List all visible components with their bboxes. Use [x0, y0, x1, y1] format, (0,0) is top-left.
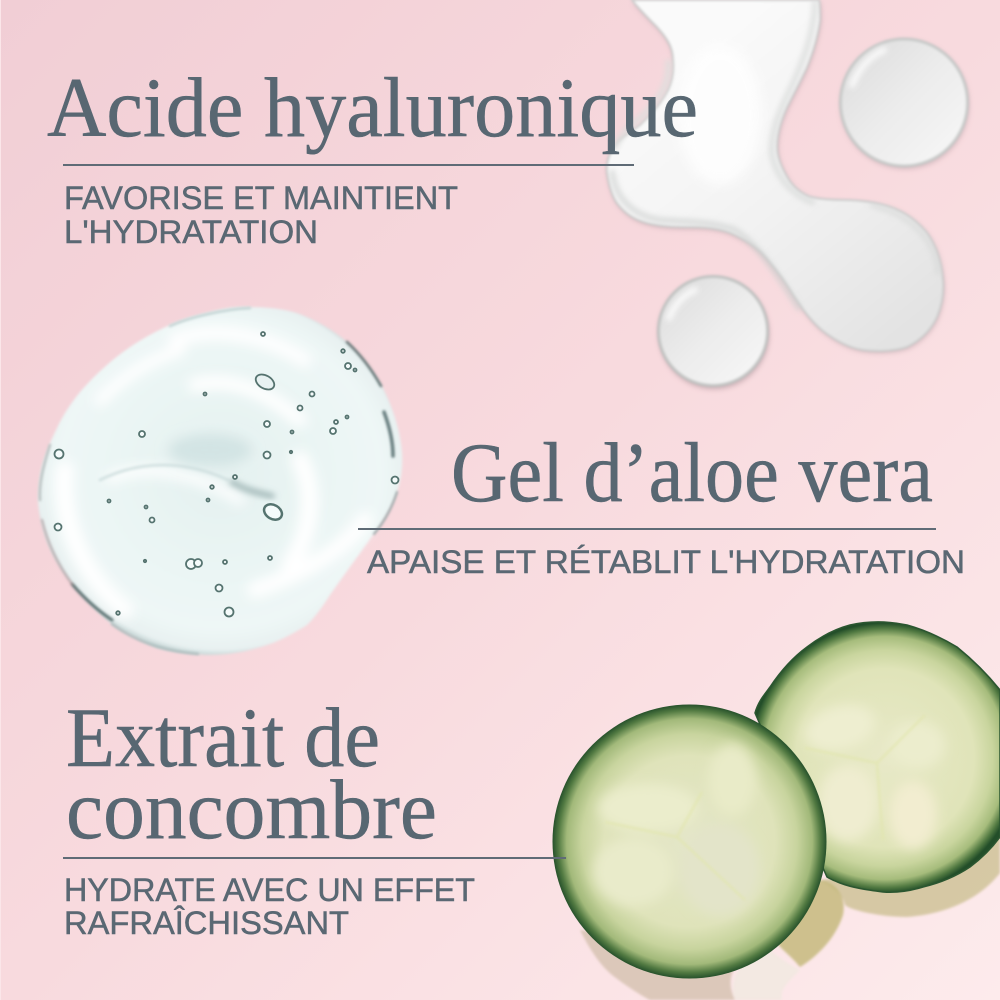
text: cucumber benefit: [64, 872, 475, 941]
droplet lower: [658, 276, 769, 389]
right slice seed cavity: [800, 697, 945, 849]
text: hyaluronic acid benefit: [64, 180, 458, 250]
heading: Extrait de concombre: Extrait de: [66, 691, 380, 785]
text: hyaluronic acid benefit: FAVORISE ET MAINTIENT: [64, 180, 458, 216]
heading: Extrait de concombre: [66, 691, 437, 857]
left slice seed cavity: [593, 744, 760, 916]
cucumber slice right: [755, 622, 1000, 892]
text: cucumber benefit: HYDRATE AVEC UN EFFET: [64, 872, 475, 908]
icon: cucumber slices: [552, 622, 1000, 1000]
icon: hyaluronic acid serum blob and droplets: [607, 0, 969, 389]
cucumber slice left: [552, 704, 826, 978]
rule: aloe vera: [358, 528, 936, 530]
cucumber shadows: [580, 830, 1000, 1000]
text: aloe vera benefit: APAISE ET RÉTABLIT L'HYDRATATION: [367, 544, 965, 580]
serum blob: [607, 0, 944, 353]
heading: Extrait de concombre: concombre: [66, 763, 437, 857]
heading: Acide hyaluronique: Acide hyaluronique: [47, 61, 698, 155]
heading: Gel d'aloe vera: Gel d’aloe vera: [451, 426, 933, 520]
rule: hyaluronic acid: [63, 164, 634, 166]
text: hyaluronic acid benefit: L'HYDRATATION: [64, 214, 318, 250]
text: cucumber benefit: RAFRAÎCHISSANT: [64, 905, 349, 941]
gel highlights: [64, 333, 365, 610]
rule: cucumber: [63, 857, 566, 859]
gel bubbles: [54, 332, 398, 616]
droplet top right: [840, 39, 969, 169]
icon: aloe vera gel swatch: [38, 307, 402, 655]
gel shading: [40, 308, 397, 654]
